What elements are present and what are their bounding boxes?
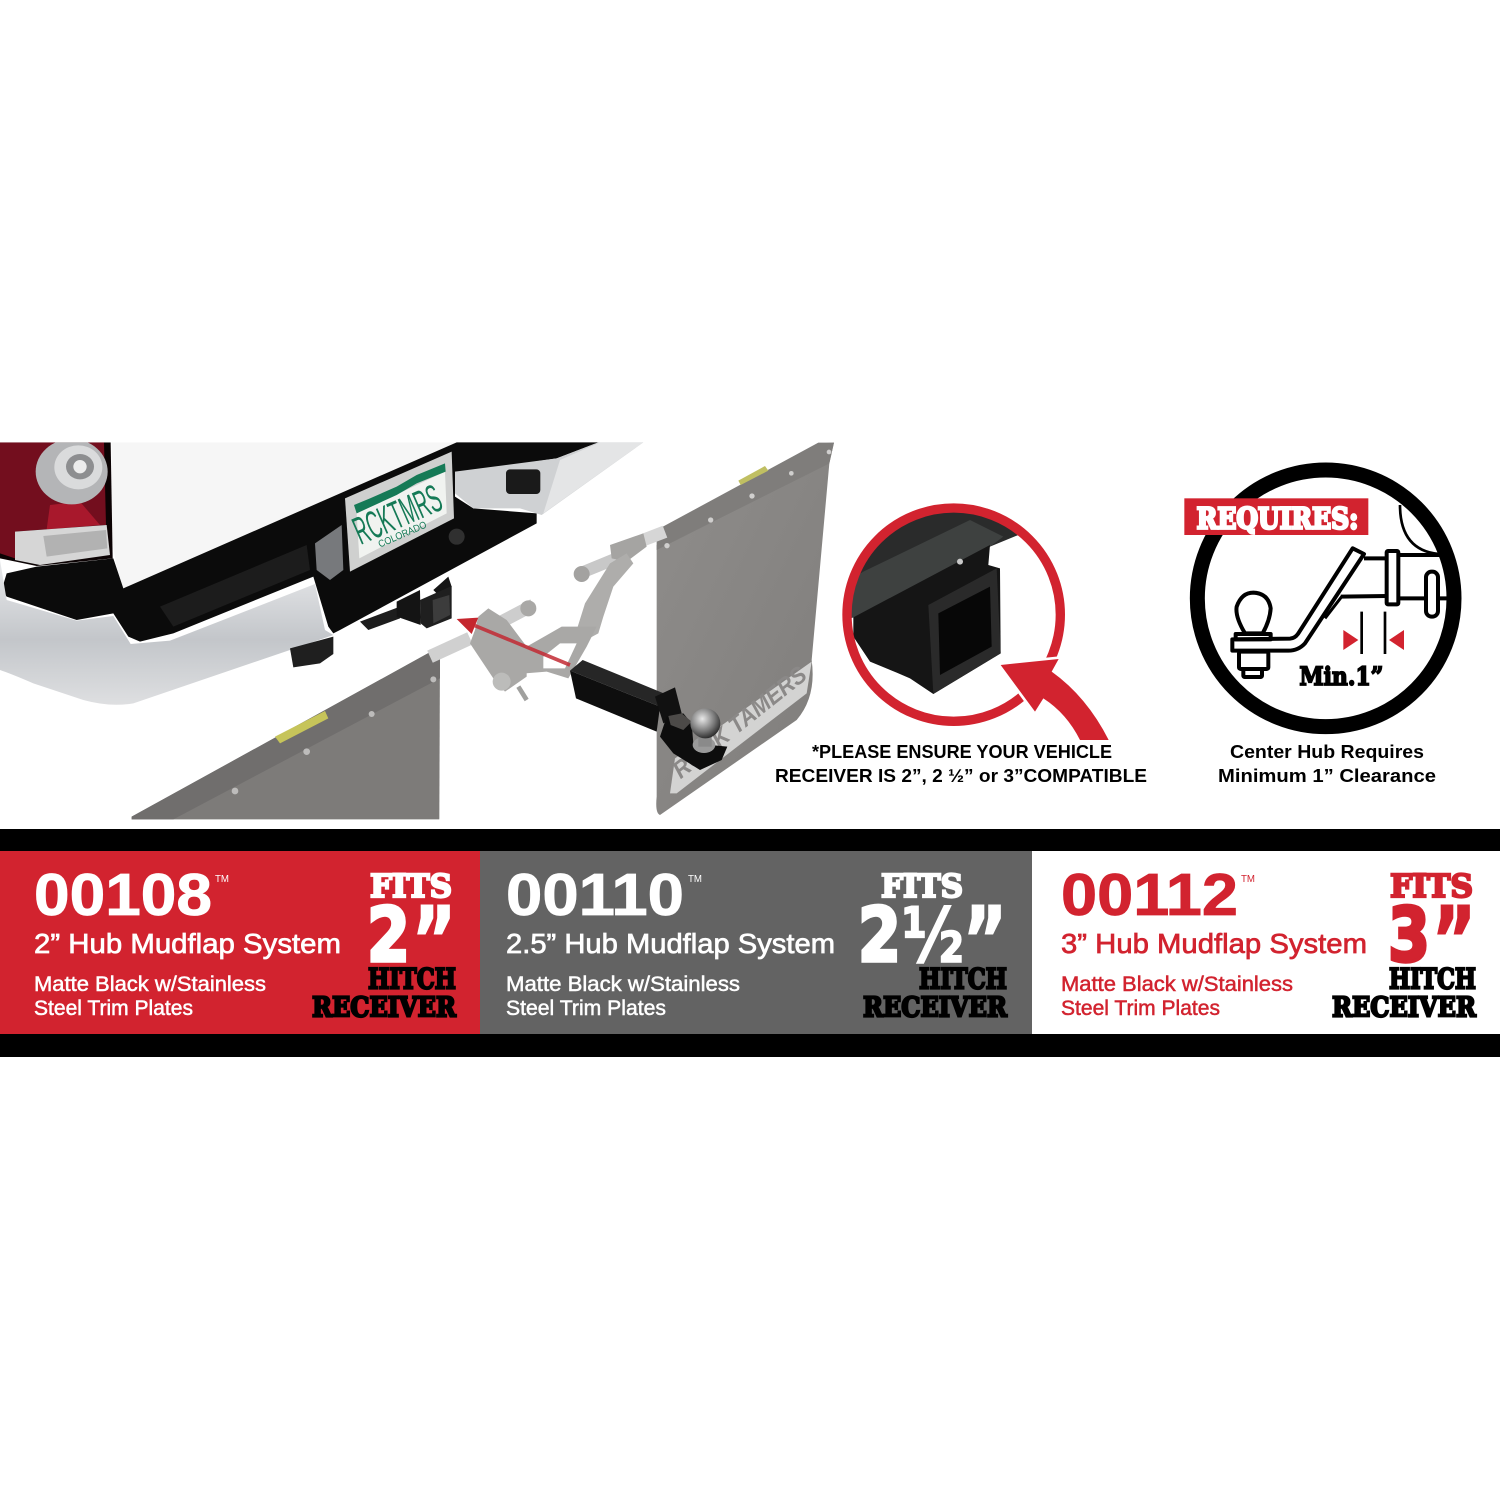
size whole: 2 <box>858 891 901 979</box>
size: 3 <box>1388 891 1430 979</box>
panel: 00112 <box>1032 851 1500 1034</box>
finish line 2: Steel Trim Plates <box>506 997 666 1020</box>
side nut <box>493 673 511 691</box>
caption line 2: Minimum 1” Clearance <box>1218 766 1436 786</box>
rivets <box>664 450 831 548</box>
black bumper cap, tailgate trough and step tray <box>2 442 598 642</box>
hitch receiver tube <box>360 577 452 630</box>
red ring <box>847 508 1060 721</box>
size: 2 <box>367 891 410 979</box>
ball mount line drawing <box>1232 505 1448 677</box>
license plate <box>345 452 454 572</box>
trademark: TM <box>688 874 702 885</box>
right chrome flank <box>449 442 643 545</box>
size one half: ½ <box>902 891 964 980</box>
chrome pocket <box>315 525 343 580</box>
product name: 2.5” Hub Mudflap System <box>506 928 835 959</box>
trademark: TM <box>215 874 229 885</box>
trough panel <box>160 545 310 627</box>
clearance caption <box>1218 742 1436 786</box>
short upper tube <box>578 558 617 574</box>
minimum label: Min.1” <box>1299 662 1383 691</box>
product name: 3” Hub Mudflap System <box>1061 928 1367 959</box>
hitch: HITCH <box>919 962 1007 996</box>
left mudflap <box>132 647 440 819</box>
close-up photo <box>852 512 1018 694</box>
taillight <box>0 439 113 566</box>
hitch ball <box>690 708 720 753</box>
logo text: ROCK TAMERS <box>668 661 812 784</box>
panel: 00108 <box>0 851 480 1034</box>
upper tube <box>643 532 665 540</box>
logo plate <box>670 662 812 793</box>
knob <box>506 469 540 494</box>
finish line 1: Matte Black w/Stainless <box>34 973 266 996</box>
ball mount shank <box>570 660 727 770</box>
dimension marks <box>1343 612 1404 654</box>
receiver plug <box>668 713 692 730</box>
clearance diagram <box>1184 470 1454 727</box>
set screw <box>518 687 527 700</box>
inch mark: ” <box>412 888 456 993</box>
U frame <box>525 627 597 678</box>
red direction arrow <box>457 618 570 665</box>
fits: FITS <box>370 867 452 905</box>
inch mark: ” <box>1432 888 1476 993</box>
tube end cap <box>520 600 536 616</box>
finish line 1: Matte Black w/Stainless <box>506 973 740 996</box>
right mudflap <box>656 443 834 815</box>
product name: 2” Hub Mudflap System <box>34 928 341 959</box>
sticker <box>738 466 768 485</box>
compatibility note <box>775 741 1147 786</box>
receiver close-up circle <box>837 503 1109 740</box>
fits: FITS <box>881 867 963 905</box>
fits: FITS <box>1390 867 1473 905</box>
requires banner: REQUIRES: <box>1197 501 1358 535</box>
finish line 2: Steel Trim Plates <box>1061 997 1220 1020</box>
black ring <box>1197 470 1454 727</box>
short tube end cap <box>574 566 590 582</box>
finish line 1: Matte Black w/Stainless <box>1061 973 1293 996</box>
hub assembly, right mudflap, ball mount <box>430 443 834 815</box>
curved red arrow <box>1001 659 1109 740</box>
tray bolt <box>449 529 465 545</box>
panel: 00110 <box>480 851 1032 1034</box>
inch mark: ” <box>963 888 1007 993</box>
upper small tube <box>502 605 533 622</box>
tailgate <box>112 442 457 588</box>
receiver: RECEIVER <box>863 992 1007 1024</box>
knuckle <box>610 533 647 562</box>
trademark: TM <box>1241 874 1255 885</box>
caption line 1: Center Hub Requires <box>1230 742 1424 762</box>
center body <box>470 608 527 692</box>
plate text: RCKTMRS <box>347 476 448 553</box>
hitch: HITCH <box>368 962 456 996</box>
black product band <box>0 829 1500 1057</box>
note line 2: RECEIVER IS 2”, 2 ½” or 3”COMPATIBLE <box>775 765 1147 786</box>
part number: 00110 <box>506 862 684 928</box>
finish line 2: Steel Trim Plates <box>34 997 193 1020</box>
arm <box>577 553 633 643</box>
left chrome bumper <box>0 560 333 705</box>
note line 1: *PLEASE ENSURE YOUR VEHICLE <box>812 741 1112 762</box>
truck rear photo <box>0 439 643 705</box>
part number: 00112 <box>1061 862 1238 928</box>
lower left tube <box>430 638 470 657</box>
tow bracket <box>290 637 333 667</box>
part number: 00108 <box>34 862 212 928</box>
receiver: RECEIVER <box>312 992 456 1024</box>
warning sticker <box>275 711 328 743</box>
receiver: RECEIVER <box>1332 992 1476 1024</box>
rivets <box>232 676 436 794</box>
hitch: HITCH <box>1389 962 1476 996</box>
plate state: COLORADO <box>377 520 429 550</box>
